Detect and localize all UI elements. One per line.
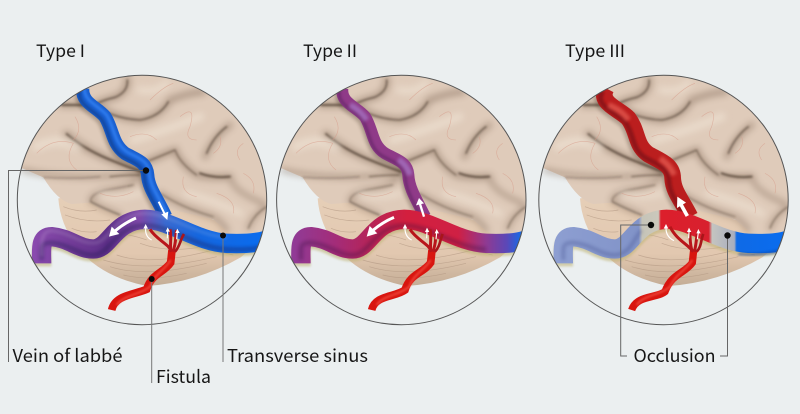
flow arrows [367, 198, 439, 240]
illustration: brain with vessels, Type III [532, 70, 798, 310]
panel: Type III [532, 70, 798, 325]
circle outline [277, 75, 526, 325]
transverse sinus [32, 213, 267, 266]
leader: vein of Labbé [8, 167, 149, 362]
fistula artery [372, 229, 443, 310]
vein of Labbé [79, 87, 167, 219]
transverse sinus with occlusions [552, 219, 788, 266]
circle outline [539, 75, 788, 325]
brain anatomy [542, 76, 788, 286]
vein of Labbé [339, 88, 425, 219]
flow arrows [664, 197, 701, 241]
heading: Type I: Type I [36, 37, 85, 62]
label: transverse sinus: Transverse sinus [227, 343, 368, 368]
leader: occlusion [621, 222, 731, 356]
circle outline [17, 75, 267, 325]
illustration: brain with vessels, Type II [269, 70, 536, 310]
heading: Type II: Type II [303, 37, 357, 62]
fistula artery [632, 227, 703, 310]
panel: Type II [269, 70, 536, 325]
vein of Labbé [601, 88, 690, 220]
label: fistula: Fistula [156, 364, 211, 389]
brain anatomy [20, 76, 266, 286]
heading: Type III: Type III [565, 37, 625, 62]
label: occlusion: Occlusion [634, 343, 716, 368]
fistula artery [112, 229, 184, 310]
illustration: brain with vessels, Type I [10, 70, 277, 310]
label: vein of Labbé: Vein of labbé [12, 343, 122, 368]
leader: transverse sinus [220, 232, 226, 362]
panel: Type I [10, 70, 277, 325]
flow arrows [109, 202, 180, 240]
leader: fistula [149, 276, 155, 383]
transverse sinus [290, 219, 526, 266]
brain anatomy [280, 76, 526, 286]
